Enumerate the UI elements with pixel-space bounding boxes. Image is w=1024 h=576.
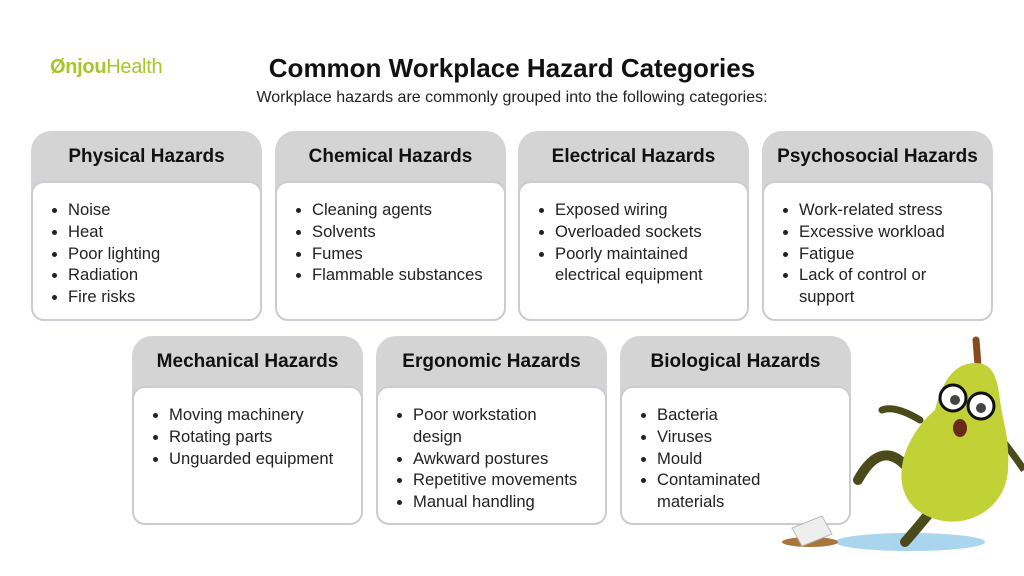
panel: ergonomic: Awkward postures (413, 449, 548, 468)
logo: ØnjouHealth (50, 56, 162, 78)
panel: psychosocial (762, 131, 993, 321)
panel: ergonomic: Repetitive movements (413, 470, 577, 489)
panel: psychosocial: Work-related stress (799, 200, 943, 219)
panel: chemical: Flammable substances (312, 265, 483, 284)
panel: physical (31, 131, 262, 321)
illustration: slipping pear (782, 336, 1024, 551)
panel: ergonomic: Ergonomic Hazards (402, 351, 581, 372)
panel: chemical: Solvents (312, 222, 376, 241)
panel: electrical: electrical equipment (555, 265, 703, 284)
panel: chemical: Cleaning agents (312, 200, 432, 219)
panel: chemical (275, 131, 506, 321)
panel: biological: Bacteria (657, 405, 718, 424)
panel: chemical: Fumes (312, 244, 363, 263)
panel: biological: Mould (657, 449, 702, 468)
panel: mechanical (132, 336, 363, 525)
panel: electrical: Exposed wiring (555, 200, 668, 219)
panel: physical: Noise (68, 200, 110, 219)
title: Common Workplace Hazard Categories (269, 53, 755, 83)
panel: electrical: Electrical Hazards (552, 146, 715, 167)
panel: psychosocial: Psychosocial Hazards (777, 146, 978, 167)
panel: biological: materials (657, 492, 724, 511)
panel: psychosocial: Fatigue (799, 244, 854, 263)
subtitle: Workplace hazards are commonly grouped into the following categories: (256, 89, 768, 106)
panel: physical: Heat (68, 222, 103, 241)
panel: biological: Biological Hazards (650, 351, 820, 372)
panel: electrical: Overloaded sockets (555, 222, 702, 241)
panel: mechanical: Moving machinery (169, 405, 304, 424)
panel: physical: Physical Hazards (68, 146, 225, 167)
panel: physical: Fire risks (68, 287, 135, 306)
panel: ergonomic: Manual handling (413, 492, 535, 511)
panel: biological: Contaminated (657, 470, 760, 489)
panel: mechanical: Rotating parts (169, 427, 272, 446)
panel: psychosocial: support (799, 287, 854, 306)
panel: physical: Radiation (68, 265, 138, 284)
panel: electrical: Poorly maintained (555, 244, 688, 263)
panel: biological: Viruses (657, 427, 712, 446)
panel: physical: Poor lighting (68, 244, 160, 263)
panel: ergonomic (376, 336, 607, 525)
panel: biological (620, 336, 851, 525)
panel: ergonomic: Poor workstation (413, 405, 537, 424)
panel: chemical: Chemical Hazards (309, 146, 472, 167)
panel: electrical (518, 131, 749, 321)
panel: psychosocial: Lack of control or (799, 265, 926, 284)
panel: mechanical: Unguarded equipment (169, 449, 333, 468)
panel: ergonomic: design (413, 427, 462, 446)
panel: mechanical: Mechanical Hazards (157, 351, 338, 372)
panel: psychosocial: Excessive workload (799, 222, 945, 241)
